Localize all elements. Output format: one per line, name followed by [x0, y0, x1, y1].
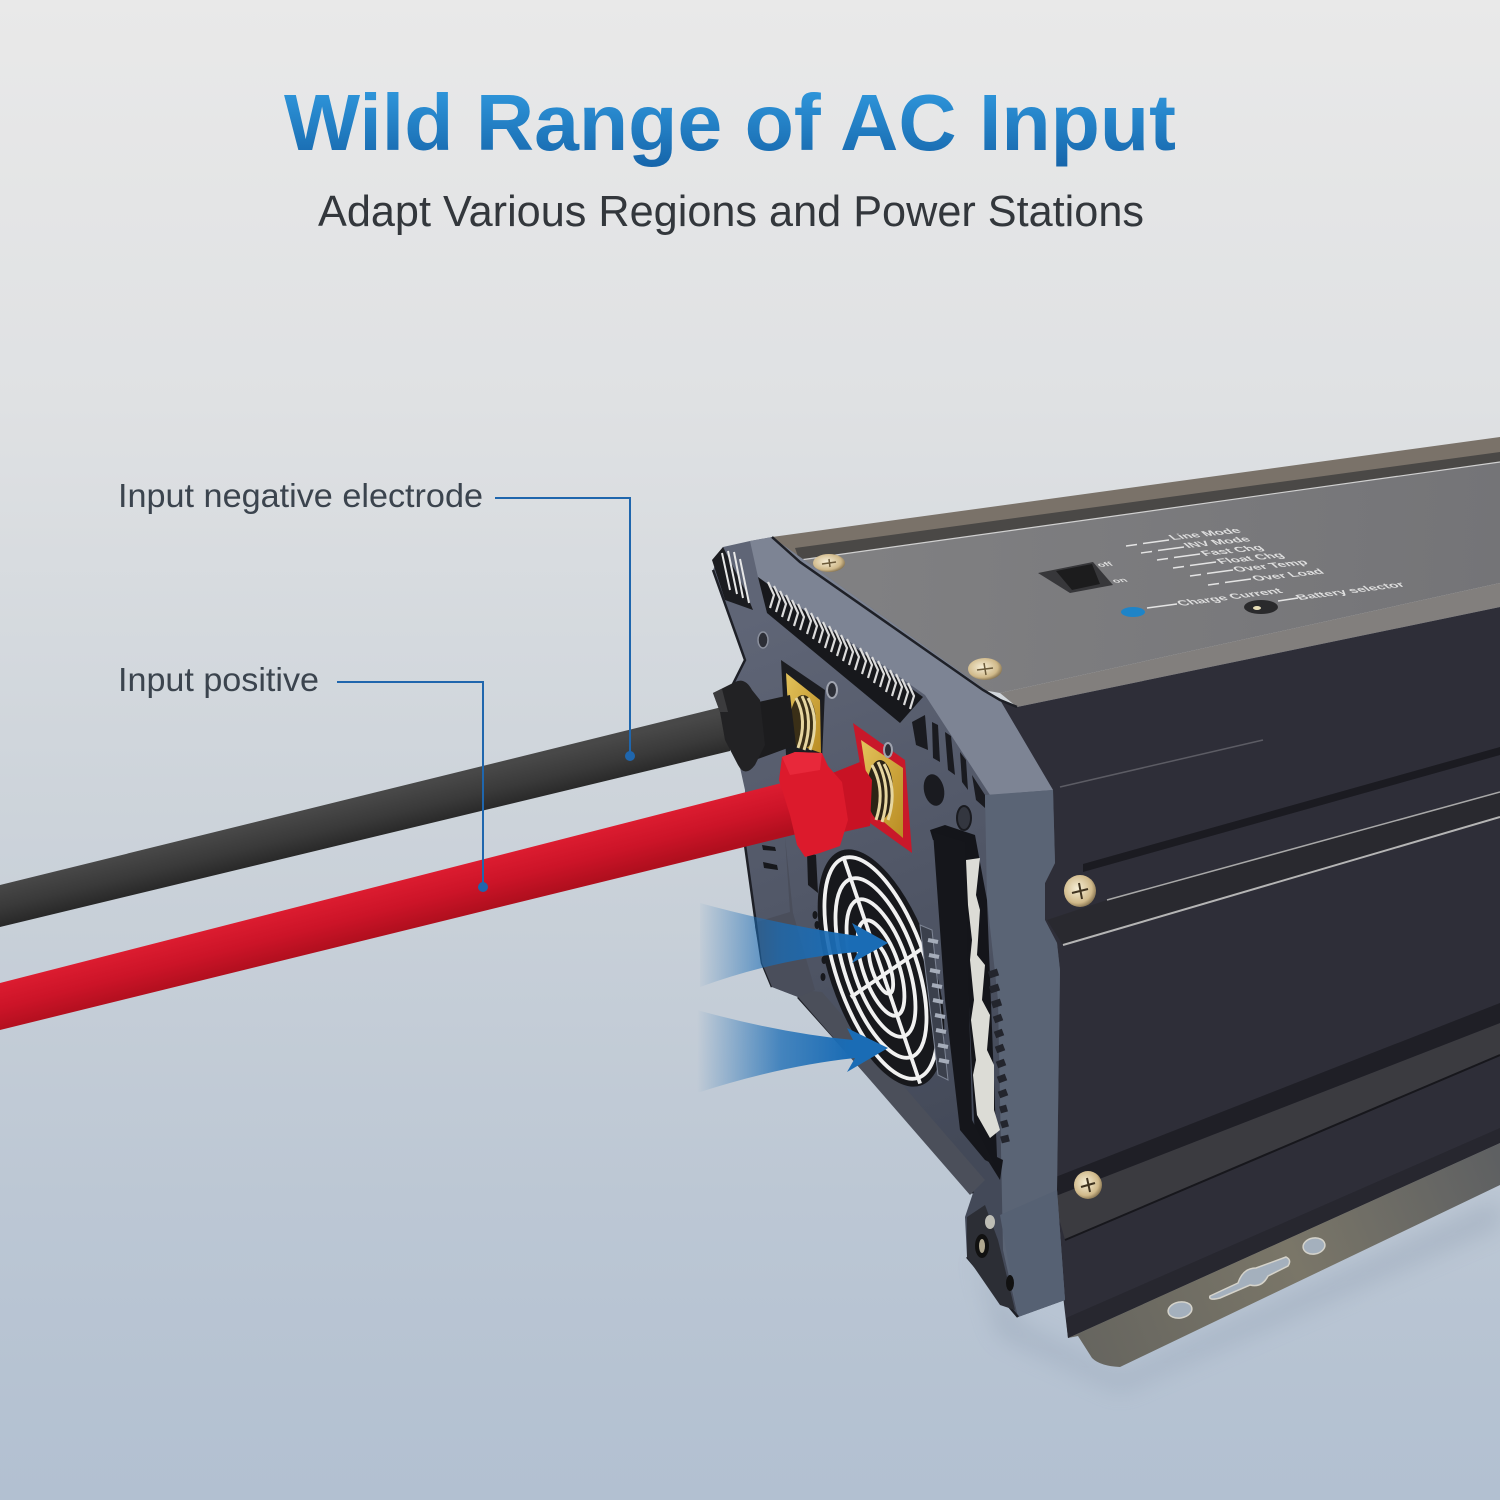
- top vent grille: [758, 577, 923, 723]
- subtitle: Adapt Various Regions and Power Stations: [318, 187, 1144, 236]
- mounting flange: [1066, 1128, 1500, 1367]
- body upper highlight: [1060, 740, 1263, 787]
- inverter product: [712, 437, 1500, 1367]
- terminal connector slot: [930, 825, 1009, 1180]
- screw: body upper: [1064, 875, 1096, 907]
- front frame: [713, 537, 1065, 1317]
- lid printed labels: Charge Current: [1174, 586, 1286, 608]
- arrow: upper airflow: [700, 903, 888, 987]
- product shadow: [975, 1200, 1500, 1390]
- screw: lid left: [813, 554, 845, 572]
- lid printed labels: Fast Chg: [1198, 543, 1267, 558]
- lid printed labels: on: [1110, 577, 1130, 585]
- charge current dial: [1121, 607, 1145, 617]
- black cable: [0, 705, 730, 927]
- lid printed labels: INV Mode: [1181, 535, 1254, 550]
- callout: input positive: Input positive: [118, 661, 319, 698]
- negative terminal: [781, 660, 837, 760]
- lid printed labels: Over Temp: [1230, 558, 1311, 574]
- screw: body lower: [1074, 1171, 1102, 1199]
- body lower ridge: [1053, 1003, 1500, 1240]
- lid printed labels: Over Load: [1249, 567, 1327, 583]
- red knob: [779, 752, 872, 857]
- frame right column: [985, 790, 1065, 1317]
- black knob: [713, 681, 796, 772]
- arrow: lower airflow: [697, 1010, 888, 1093]
- lid printed labels: off: [1095, 561, 1117, 569]
- frame bottom strip: [798, 990, 985, 1195]
- lid printed labels: Float Chg: [1214, 551, 1287, 566]
- fan guard: [792, 834, 970, 1102]
- screw: lid front: [968, 658, 1002, 680]
- power switch: [1038, 562, 1113, 593]
- lid rim: [772, 437, 1500, 562]
- battery selector dial: [1244, 600, 1278, 614]
- callout: input negative electrode: [118, 477, 635, 761]
- body upper ridge: [1047, 747, 1500, 945]
- callout: input positive: [118, 661, 488, 892]
- left corner grille: [712, 547, 753, 610]
- title: Wild Range of AC Input: [284, 78, 1176, 167]
- callout: input negative electrode: Input negative electrode: [118, 477, 483, 514]
- lid printed labels: [1095, 526, 1408, 608]
- positive terminal: [853, 723, 912, 853]
- dark body: [1000, 607, 1500, 1338]
- left column vents and foot: [757, 632, 826, 997]
- lid top face: [800, 462, 1500, 707]
- fan label plate: [920, 925, 949, 1080]
- lid printed labels: Battery selector: [1293, 580, 1408, 602]
- frame top chamfer: [750, 537, 1053, 795]
- foot bracket: [967, 1205, 1015, 1310]
- frame dark outline details: [713, 537, 1018, 1317]
- red cable: [0, 777, 805, 1030]
- side vent slots: [912, 715, 985, 830]
- lid printed labels: Line Mode: [1166, 526, 1244, 542]
